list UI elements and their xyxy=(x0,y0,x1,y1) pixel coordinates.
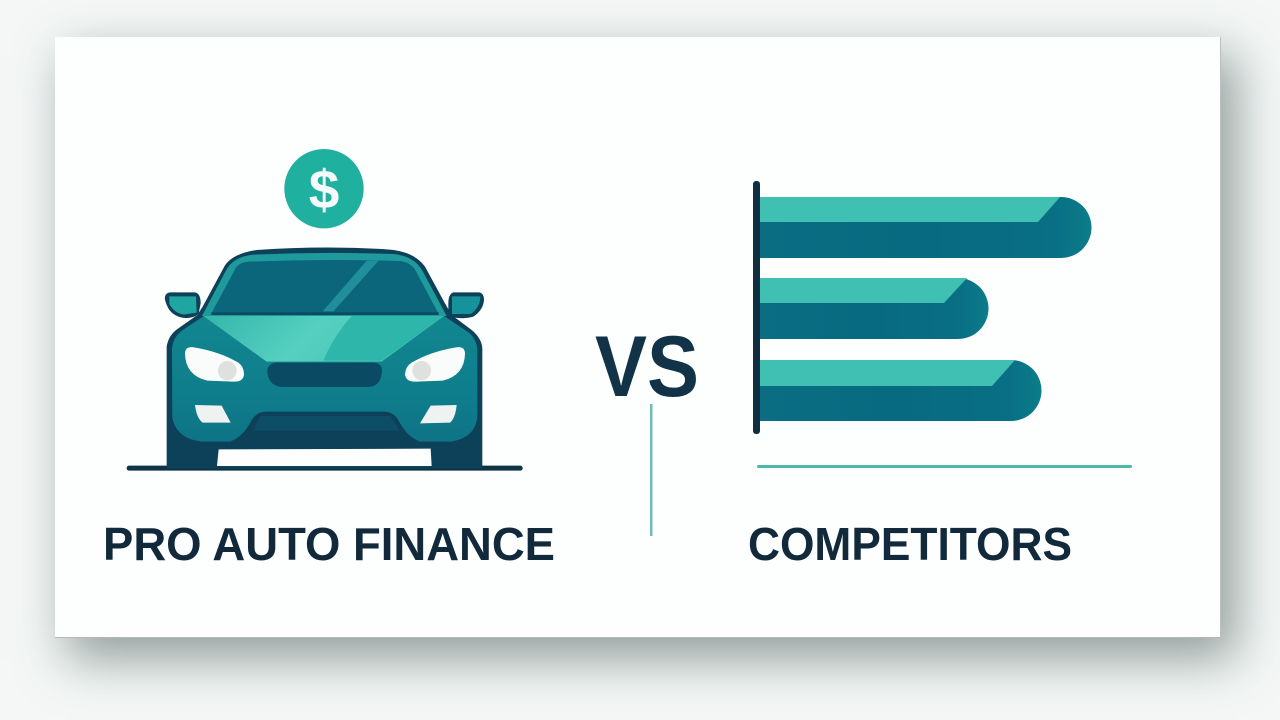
bar 1 xyxy=(760,197,1092,258)
ground line xyxy=(127,466,523,471)
panel: comparison card xyxy=(55,37,1220,637)
bar chart: competitors xyxy=(753,181,1092,434)
label: Pro Auto Finance: PRO AUTO FINANCE xyxy=(103,518,555,570)
icon: dollar coin xyxy=(284,149,364,228)
windscreen frame xyxy=(202,253,447,316)
right mirror xyxy=(448,292,484,318)
left fog light xyxy=(195,405,231,423)
windscreen reflection xyxy=(323,261,379,311)
hood xyxy=(203,316,444,362)
vertical divider xyxy=(650,404,652,536)
lower grille xyxy=(253,416,399,431)
windscreen glass xyxy=(211,260,438,313)
right headlight xyxy=(405,347,465,382)
icon: car with dollar coin xyxy=(127,149,523,471)
under-car white gap xyxy=(217,449,432,466)
front grille xyxy=(267,363,382,387)
bar 2 xyxy=(760,278,988,339)
label: Competitors: COMPETITORS xyxy=(748,518,1072,570)
hood highlight xyxy=(323,316,444,361)
car silhouette xyxy=(167,247,482,468)
left headlight xyxy=(185,347,244,382)
car body xyxy=(172,316,477,442)
left mirror xyxy=(165,292,201,318)
vs label: VS xyxy=(595,319,699,415)
bar chart axis xyxy=(753,181,760,434)
baseline xyxy=(757,465,1132,468)
windscreen base line xyxy=(211,312,439,315)
icon: dollar coin: $ xyxy=(309,158,339,220)
right fog light xyxy=(420,405,457,423)
bar 3 xyxy=(760,360,1041,421)
